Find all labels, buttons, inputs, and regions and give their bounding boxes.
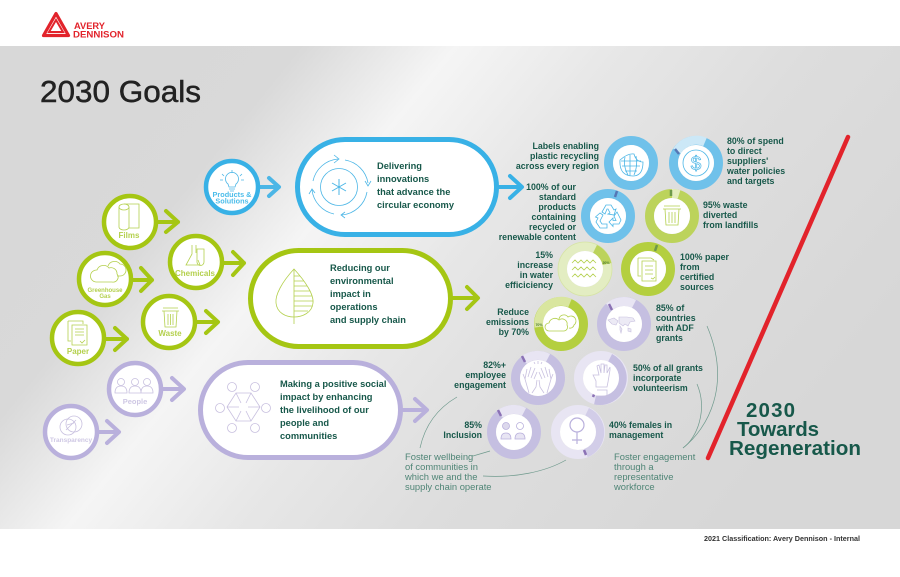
- label: volunteerism: [633, 363, 703, 393]
- donut: emissions: [535, 301, 584, 346]
- label: recycled content: containing: [532, 212, 576, 222]
- label: waste: 95% waste: [703, 200, 748, 210]
- label: females: management: [609, 430, 663, 440]
- heading: towards regeneration: [729, 399, 861, 460]
- text: innovations: [377, 174, 429, 184]
- logo: [44, 14, 124, 40]
- input: People: People: [123, 397, 147, 406]
- logo: AVERY: [74, 21, 105, 31]
- label: water policies: [726, 136, 785, 186]
- label: emissions: by 70%: [499, 327, 529, 337]
- text: impact by enhancing: [280, 392, 373, 402]
- pill: circular economy: [298, 140, 522, 234]
- label: plastic recycling: Labels enabling: [533, 141, 599, 151]
- input: Products & Solutions: [206, 161, 279, 213]
- label: recycled content: renewable content: [499, 232, 576, 242]
- text: [330, 263, 406, 325]
- text: impact in: [330, 289, 371, 299]
- label: employee engagement: 82%+: [483, 360, 506, 370]
- note: wellbeing: Foster wellbeing: [405, 451, 473, 462]
- label: plastic recycling: plastic recycling: [530, 151, 599, 161]
- donut: water efficiency: [558, 242, 612, 296]
- note: engagement: [613, 451, 696, 492]
- label: females: 40% females in: [609, 420, 672, 430]
- donut: ADF grants: [602, 302, 646, 346]
- donut: inclusion: [492, 409, 536, 454]
- label: recycled content: [499, 182, 577, 242]
- note: wellbeing: which we and the: [404, 471, 477, 482]
- note: engagement: workforce: [613, 481, 655, 492]
- text: [377, 161, 455, 210]
- label: plastic recycling: across every region: [516, 161, 599, 171]
- label: emissions: Reduce: [497, 307, 529, 317]
- input: Transparency: [45, 406, 119, 458]
- input: People: [109, 363, 184, 415]
- label: recycled content: 100% of our: [526, 182, 577, 192]
- label: water policies: to direct: [727, 146, 762, 156]
- text: circular economy: [377, 200, 455, 210]
- icon: circular arrows: [309, 155, 371, 218]
- footer classification: 2021 Classification: Avery Dennison - Internal: [704, 534, 860, 543]
- donut: certified paper: [626, 245, 670, 292]
- donut: recycled content: [586, 191, 630, 238]
- donut: volunteerism: [578, 356, 624, 400]
- input: Waste: [143, 296, 218, 348]
- label: waste: from landfills: [703, 220, 758, 230]
- label: waste: [703, 200, 758, 230]
- label: paper: [680, 252, 729, 292]
- text: Delivering: [377, 161, 422, 171]
- donut: water efficiency: 20%: [602, 261, 610, 265]
- donut: females in management: [556, 410, 600, 455]
- donut: water policies: [674, 140, 718, 186]
- label: employee engagement: engagement: [454, 380, 506, 390]
- label: plastic recycling: [516, 141, 599, 171]
- text: Making a positive social: [280, 379, 386, 389]
- label: water efficiency: increase: [517, 260, 553, 270]
- label: paper: 100% paper: [680, 252, 729, 262]
- heading: towards regeneration: Towards: [737, 418, 819, 441]
- note: engagement: through a: [614, 461, 654, 472]
- input: Paper: [52, 312, 127, 364]
- label: employee engagement: employee: [465, 370, 506, 380]
- label: water efficiency: in water: [520, 270, 554, 280]
- logo: DENNISON: [73, 30, 124, 40]
- text: Reducing our: [330, 263, 390, 273]
- label: recycled content: recycled or: [529, 222, 577, 232]
- label: females: [609, 420, 672, 440]
- input: Greenhouse Gas: [79, 253, 152, 305]
- text: people and: [280, 418, 329, 428]
- input: Products & Solutions: Products &: [213, 190, 252, 199]
- text: environmental: [330, 276, 394, 286]
- pill: environmental impact: [250, 250, 478, 346]
- label: water efficiency: 15%: [535, 250, 553, 260]
- donut: waste diverted: [650, 190, 694, 238]
- input: Chemicals: [170, 236, 244, 288]
- input: Chemicals: Chemicals: [175, 269, 216, 278]
- label: recycled content: products: [538, 202, 576, 212]
- input: Products & Solutions: Solutions: [215, 196, 249, 206]
- text: and supply chain: [330, 315, 406, 325]
- connector lines: [420, 326, 718, 476]
- heading: towards regeneration: 2030: [746, 399, 795, 422]
- input: Films: Films: [119, 231, 140, 240]
- label: recycled content: standard: [539, 192, 576, 202]
- donut: water policies: $: [691, 154, 702, 175]
- text: the livelihood of our: [280, 405, 369, 415]
- heading: towards regeneration: Regeneration: [729, 437, 861, 460]
- note: engagement: representative: [614, 471, 673, 482]
- label: emissions: [486, 307, 529, 337]
- label: ADF grants: [655, 303, 696, 343]
- label: water policies: and targets: [727, 176, 775, 186]
- icon: network: [216, 382, 270, 432]
- icon: leaf: [276, 269, 313, 324]
- label: water efficiency: efficiciency: [505, 280, 553, 290]
- text: operations: [330, 302, 378, 312]
- input: Films: [104, 196, 178, 248]
- donut: plastic recycling: [608, 140, 654, 186]
- label: water policies: water policies: [726, 166, 785, 176]
- label: ADF grants: 85% of: [656, 303, 684, 313]
- label: ADF grants: with ADF: [655, 323, 694, 333]
- input: Greenhouse Gas: Greenhouse: [87, 288, 123, 294]
- label: employee engagement: [454, 360, 506, 390]
- label: inclusion: Inclusion: [443, 430, 482, 440]
- donut: employee engagement: [516, 355, 560, 400]
- label: water policies: suppliers': [727, 156, 768, 166]
- label: paper: sources: [680, 282, 714, 292]
- label: ADF grants: countries: [656, 313, 696, 323]
- text: that advance the: [377, 187, 450, 197]
- label: waste: diverted: [703, 210, 737, 220]
- label: water efficiency: [505, 250, 554, 290]
- input: Transparency: Transparency: [50, 437, 93, 444]
- label: paper: from: [680, 262, 700, 272]
- note: wellbeing: [404, 451, 492, 492]
- input: Greenhouse Gas: Gas: [99, 294, 111, 300]
- input: Waste: Waste: [158, 329, 182, 338]
- red line: [708, 137, 848, 458]
- donut: emissions: 70%: [535, 323, 543, 327]
- note: engagement: Foster engagement: [614, 451, 696, 462]
- label: volunteerism: 50% of all grants: [633, 363, 703, 373]
- note: wellbeing: supply chain operate: [405, 481, 492, 492]
- pill: social impact: [200, 362, 427, 458]
- title: 2030 Goals: [40, 74, 201, 109]
- label: volunteerism: volunteerism: [633, 383, 688, 393]
- label: emissions: emissions: [486, 317, 529, 327]
- text: [280, 379, 386, 441]
- label: inclusion: [443, 420, 482, 440]
- input: Paper: Paper: [67, 347, 89, 356]
- label: ADF grants: grants: [656, 333, 683, 343]
- text: communities: [280, 431, 337, 441]
- note: wellbeing: of communities in: [405, 461, 478, 472]
- label: inclusion: 85%: [464, 420, 482, 430]
- label: water policies: 80% of spend: [727, 136, 784, 146]
- label: paper: certified: [680, 272, 714, 282]
- label: volunteerism: incorporate: [633, 373, 681, 383]
